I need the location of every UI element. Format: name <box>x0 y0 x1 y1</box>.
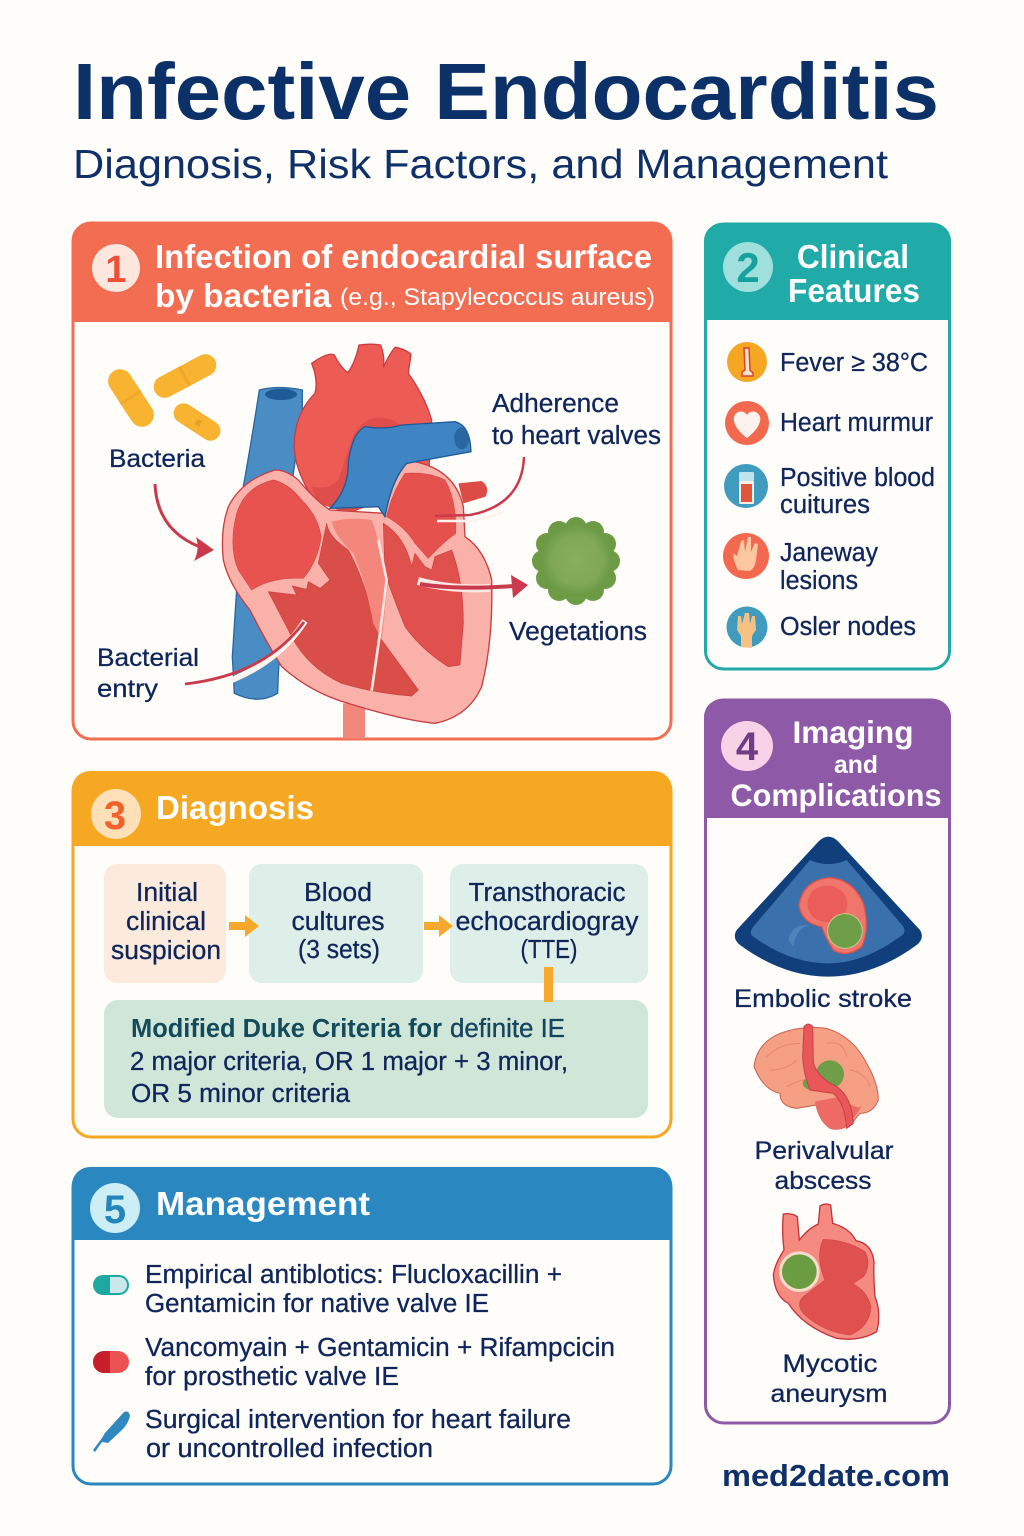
panel 4 header <box>704 699 951 818</box>
panel 3 heading: Diagnosis <box>156 789 314 826</box>
panel 2 heading <box>788 238 920 309</box>
item: surgical intervention: or uncontrolled infection <box>146 1435 433 1463</box>
panel 2 heading: Features <box>788 272 920 309</box>
panel 1 heading: by bacteria <box>155 277 332 314</box>
item: empirical antibiotics <box>93 1261 562 1318</box>
panel 2 header <box>704 223 951 320</box>
feature: heart murmur: Heart murmur <box>780 409 933 437</box>
number badge 4: 4 <box>736 725 759 769</box>
feature: positive blood cultures <box>724 464 935 519</box>
number badge 5: 5 <box>104 1188 126 1232</box>
callout: modified duke criteria: Modified Duke Criteria for <box>131 1015 442 1043</box>
step: blood cultures: Blood <box>304 879 372 907</box>
step: transthoracic echocardiography: Transthoracic <box>468 879 626 907</box>
step: blood cultures: (3 sets) <box>298 936 380 964</box>
number badge 5 <box>90 1183 140 1233</box>
feature: janeway lesions: Janeway <box>780 539 878 567</box>
subtitle: Diagnosis, Risk Factors, and Management <box>73 141 889 187</box>
icon: hand <box>723 533 769 579</box>
panel 3 header <box>72 771 672 846</box>
panel: management <box>72 1167 672 1484</box>
panel 1 heading: Infection of endocardial surface <box>155 238 652 275</box>
icon: teal capsule <box>93 1275 129 1295</box>
panel 1 header <box>72 222 672 322</box>
feature: positive blood cultures: cuitures <box>780 491 870 519</box>
septum <box>332 519 388 640</box>
label: adherence: Adherence <box>492 390 619 418</box>
label: vegetations: Vegetations <box>509 618 647 646</box>
item: empirical antibiotics: Empirical antiblotics: Flucloxacillin + <box>145 1261 562 1289</box>
heart illustration <box>222 344 492 739</box>
footer: website: med2date.com <box>722 1458 950 1493</box>
panel 1 heading: (e.g., Stapylecoccus aureus) <box>340 284 655 311</box>
arrow: adherence line <box>435 457 524 521</box>
number badge 2: 2 <box>736 244 760 291</box>
arrow: bacterial entry line <box>185 621 305 684</box>
arrow: step 1 to 2 <box>229 915 259 937</box>
label: bacteria: Bacteria <box>109 445 205 473</box>
arrow: to vegetations <box>418 575 528 598</box>
callout: modified duke criteria: definite IE <box>450 1015 565 1043</box>
step: initial clinical suspicion: suspicion <box>111 937 221 965</box>
number badge 4 <box>721 721 773 771</box>
step: blood cultures <box>249 864 423 983</box>
illustration: heart with aneurysm <box>773 1204 879 1339</box>
upper left chamber <box>233 480 321 590</box>
item: surgical intervention: Surgical intervention for heart failure <box>145 1406 571 1434</box>
item: empirical antibiotics: Gentamicin for native valve IE <box>145 1290 489 1318</box>
septal line <box>372 540 387 691</box>
upper right chamber <box>387 473 456 558</box>
item: vancomycin: for prosthetic valve IE <box>145 1363 399 1391</box>
panel: imaging and complications <box>704 699 951 1423</box>
panel 5 header <box>72 1167 672 1240</box>
number badge 2 <box>723 242 773 292</box>
feature: heart murmur <box>725 401 933 445</box>
label: adherence <box>492 390 661 450</box>
feature: fever <box>727 342 928 382</box>
feature: osler nodes: Osler nodes <box>780 613 916 641</box>
panel: clinical features <box>704 223 951 669</box>
label: bacterial entry: Bacterial <box>97 644 199 672</box>
panel 5 heading: Management <box>156 1185 370 1222</box>
label: bacterial entry: entry <box>97 675 159 703</box>
label: perivalvular abscess: Perivalvular <box>754 1137 894 1165</box>
aorta <box>294 344 432 513</box>
step: transthoracic echocardiography <box>450 864 648 983</box>
label: perivalvular abscess <box>754 1137 894 1195</box>
callout: modified duke criteria: OR 5 minor criteria <box>131 1080 351 1108</box>
number badge 3: 3 <box>104 794 126 838</box>
arrow: bacteria to heart <box>155 484 214 561</box>
step: transthoracic echocardiography: (TTE) <box>520 936 578 964</box>
label: embolic stroke: Embolic stroke <box>734 985 912 1013</box>
arrow: connector to criteria <box>544 967 553 1002</box>
illustration: brain <box>754 1024 878 1129</box>
callout: modified duke criteria <box>104 1000 648 1118</box>
label: bacterial entry <box>97 644 199 703</box>
icon: bacteria <box>104 350 224 445</box>
label: adherence: to heart valves <box>492 422 661 450</box>
step: initial clinical suspicion: clinical <box>126 908 206 936</box>
heart wall <box>222 462 492 723</box>
panel 4 heading: Complications <box>730 777 942 813</box>
panel 1 heading <box>155 238 655 314</box>
icon: heart <box>725 401 769 445</box>
step: blood cultures: cultures <box>292 908 384 936</box>
panel 4 heading: Imaging <box>792 714 914 750</box>
item: surgical intervention <box>93 1406 571 1463</box>
panel: diagnosis <box>72 771 672 1137</box>
label: perivalvular abscess: abscess <box>774 1167 872 1195</box>
icon: vegetation <box>532 517 620 605</box>
right ventricle <box>383 523 463 667</box>
icon: red capsule <box>93 1351 129 1373</box>
number badge 1 <box>92 244 140 292</box>
step: initial clinical suspicion: Initial <box>136 879 198 907</box>
label: mycotic aneurysm: Mycotic <box>782 1350 878 1378</box>
left ventricle <box>268 523 418 696</box>
icon: scalpel <box>93 1412 130 1452</box>
illustration: ultrasound <box>735 837 922 977</box>
feature: janeway lesions: lesions <box>780 567 858 595</box>
vena cava <box>232 387 302 699</box>
item: vancomycin: Vancomyain + Gentamicin + Rifampcicin <box>145 1334 615 1362</box>
feature: fever: Fever ≥ 38°C <box>780 349 928 377</box>
icon: blood culture bottle <box>724 464 768 508</box>
number badge 3 <box>91 789 141 839</box>
title: Infective Endocarditis <box>73 47 939 136</box>
icon: finger <box>726 606 768 648</box>
feature: janeway lesions <box>723 533 878 595</box>
label: mycotic aneurysm: aneurysm <box>770 1380 888 1408</box>
step: initial clinical suspicion <box>104 864 226 983</box>
arrow: step 2 to 3 <box>424 915 453 937</box>
feature: positive blood cultures: Positive blood <box>780 464 935 492</box>
pulmonary stem <box>343 703 365 739</box>
label: mycotic aneurysm <box>770 1350 888 1408</box>
panel 2 heading: Clinical <box>797 238 909 275</box>
icon: thermometer <box>727 342 767 382</box>
item: vancomycin <box>93 1334 615 1391</box>
number badge 1: 1 <box>105 249 127 291</box>
right vessel <box>458 481 487 503</box>
callout: modified duke criteria: 2 major criteria, OR 1 major + 3 minor, <box>130 1048 568 1076</box>
pulmonary trunk <box>330 422 471 517</box>
panel 4 heading <box>730 714 942 813</box>
panel: infection of endocardial surface <box>72 222 672 739</box>
panel 4 heading: and <box>834 751 878 779</box>
feature: osler nodes <box>726 606 916 648</box>
step: transthoracic echocardiography: echocardiogray <box>456 908 639 936</box>
